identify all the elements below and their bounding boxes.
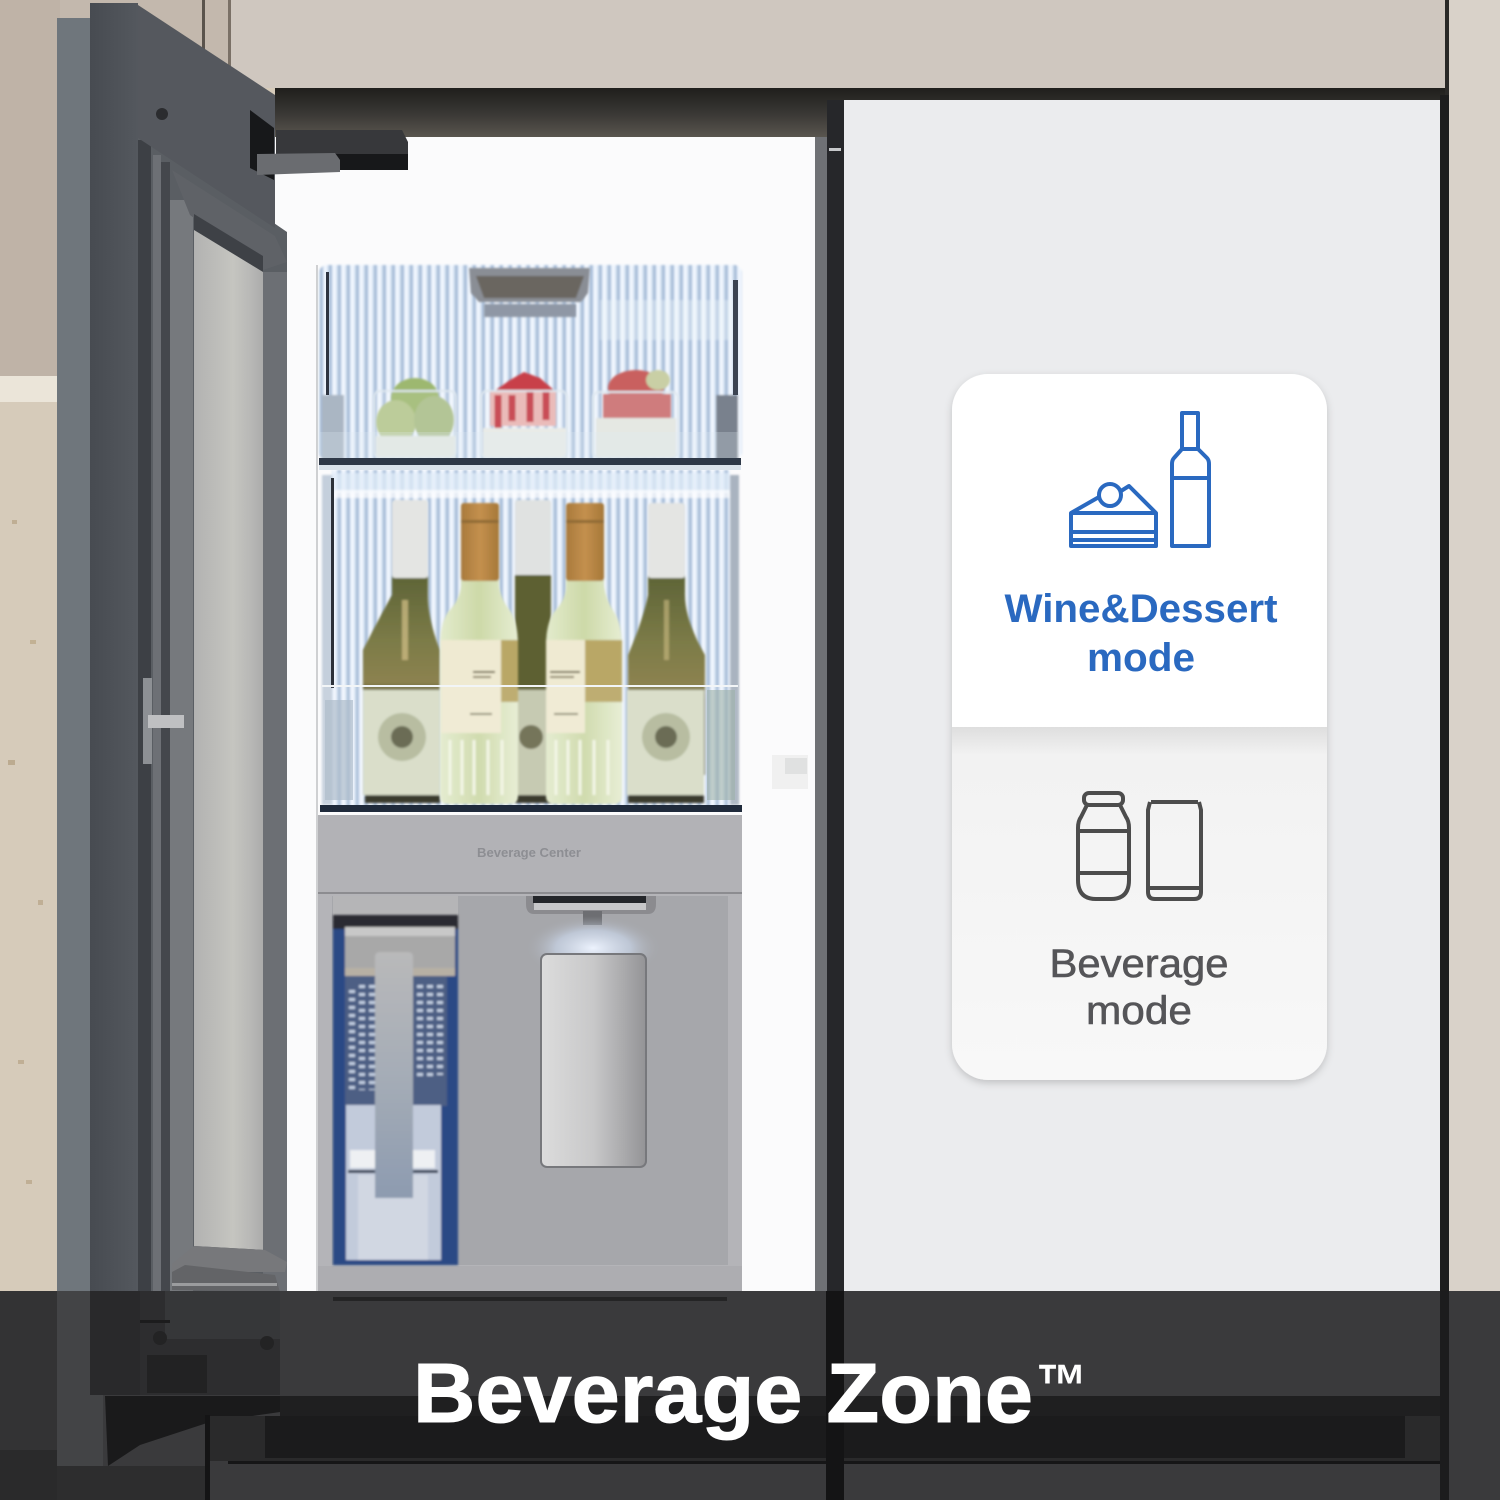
shelf ledge [319,432,741,470]
water dispenser [525,896,661,1167]
hinge arm [257,130,408,175]
bottom banner [0,1291,1500,1500]
mode selector card [952,374,1327,1080]
dessert bowl: mixed fruit [593,370,678,458]
heading: wine and dessert mode: mode [1087,636,1195,680]
pitcher handle [375,952,413,1198]
panel: closed door [844,95,1449,1292]
wine and dessert compartment [319,265,742,810]
heading: beverage mode: Beverage [1050,942,1228,986]
wine bottles back row [363,500,705,803]
icon: jar and can [1078,793,1201,899]
wine bottle 4 [546,503,622,804]
wine bottles front row [440,503,622,804]
air vent [469,268,590,317]
lower bin front [320,685,742,812]
drip plate [541,954,646,1167]
title: Beverage Zone [413,1346,1033,1440]
wine bottle 5 [627,503,705,803]
dispenser recess panel [318,892,742,1291]
door glass [194,230,265,1250]
title: ™ [1036,1352,1087,1419]
panel: open fridge interior [272,100,844,1297]
door hinge bracket top [138,5,275,228]
dessert bowl: strawberry [481,372,567,459]
water pitcher [333,915,458,1265]
heading: wine and dessert mode: Wine&Dessert [1004,587,1278,631]
wine bottle 3 [515,500,551,803]
wine bottle 2 [440,503,518,804]
door side latch [143,678,184,764]
heading: beverage mode: mode [1086,989,1192,1033]
beverage center panel [318,815,742,893]
label: beverage center: Beverage Center [477,845,581,860]
panel: open door [57,3,408,1293]
recess above the doors [275,88,1445,140]
wine bottle 1 [363,500,440,803]
icon: cake and wine bottle [1071,413,1209,546]
door latch button [772,755,808,789]
dessert bowl: green [374,378,456,459]
